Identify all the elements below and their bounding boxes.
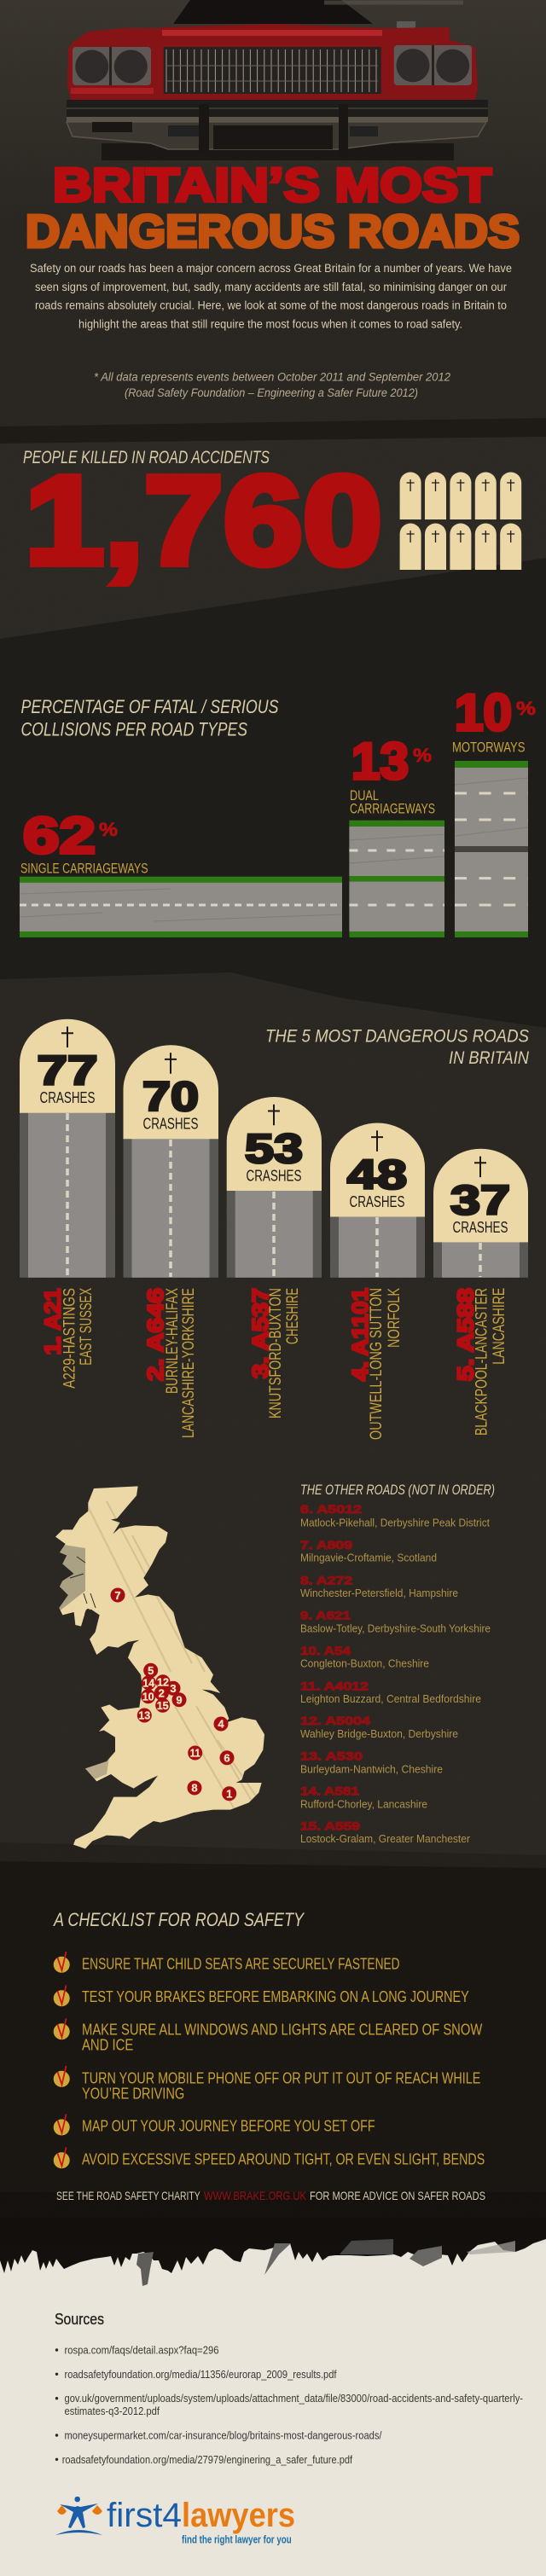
map pin numbers: 14 [142, 1676, 155, 1689]
map pin numbers: 3 [170, 1682, 177, 1695]
title line 2: DANGEROUS ROADS [26, 206, 520, 258]
column: A588 37 crashes [433, 1149, 528, 1278]
stat: motorways 10%: MOTORWAYS [452, 739, 526, 755]
column: A1101 48 crashes: CRASHES [350, 1193, 404, 1210]
list: sources: moneysupermarket.com/car-insurance/blog/britains-most-dangerous-roads/ [65, 2429, 382, 2441]
list: other roads: Matlock-Pikehall, Derbyshire Peak District [300, 1517, 490, 1529]
intro paragraph: seen signs of improvement, but, sadly, many accidents are still fatal, so minimising danger on our [35, 281, 507, 293]
heading: checklist: A CHECKLIST FOR ROAD SAFETY [52, 1909, 305, 1930]
vertical label: road 2 [142, 1288, 198, 1438]
intro paragraph [30, 262, 512, 331]
checklist items [82, 1954, 485, 2168]
vertical label: road 2: BURNLEY-HALIFAX [164, 1288, 182, 1394]
column: A646 70 crashes: 70 [142, 1075, 199, 1120]
map pin numbers: 7 [114, 1589, 121, 1602]
map pin numbers: 10 [142, 1690, 154, 1703]
heading: percentage of collisions: PERCENTAGE OF FATAL / SERIOUS [20, 696, 278, 717]
vertical label: road 2: 2. A646 [142, 1288, 168, 1381]
list: other roads: Leighton Buzzard, Central Bedfordshire [300, 1692, 481, 1705]
map pin numbers: 1 [226, 1787, 232, 1800]
vertical label: road 5: LANCASHIRE [491, 1288, 508, 1365]
checklist items: YOU’RE DRIVING [82, 2085, 184, 2103]
car bumper [67, 100, 488, 157]
checklist items: ENSURE THAT CHILD SEATS ARE SECURELY FASTENED [82, 1954, 400, 1972]
panel: map and other roads [51, 1480, 495, 1855]
road: motorway [455, 761, 528, 937]
map pin numbers: 6 [224, 1751, 230, 1764]
panel: people killed [23, 447, 521, 591]
vertical label: road 4 [347, 1288, 404, 1440]
list: other roads: Baslow-Totley, Derbyshire-South Yorkshire [300, 1622, 491, 1634]
list: other roads: 14. A581 [300, 1784, 359, 1797]
heading: people killed: PEOPLE KILLED IN ROAD ACCIDENTS [23, 447, 270, 467]
checklist items: AND ICE [82, 2036, 133, 2054]
vertical label: road 1: A229-HASTINGS [61, 1288, 78, 1389]
list: sources: rospa.com/faqs/detail.aspx?faq=296 [65, 2344, 218, 2356]
column: A1101 48 crashes [330, 1123, 425, 1278]
logo wordmark: first4 [107, 2497, 182, 2534]
column: A21 77 crashes: CRASHES [39, 1089, 96, 1106]
list: other roads: Winchester-Petersfield, Hampshire [300, 1587, 458, 1599]
vertical label: road 4: OUTWELL-LONG SUTTON [368, 1288, 386, 1440]
under car shadow [102, 143, 454, 160]
icons: check marks [54, 1952, 70, 2168]
left headlights [73, 47, 151, 85]
map pin numbers: 13 [138, 1709, 150, 1722]
column: A588 37 crashes: 37 [450, 1179, 510, 1224]
map pin numbers: 8 [191, 1782, 198, 1795]
stat: motorways 10%: 10 [455, 684, 512, 741]
map pin numbers: 4 [218, 1718, 224, 1731]
vertical label: road 5: BLACKPOOL-LANCASTER [473, 1288, 491, 1436]
right headlights [394, 45, 472, 85]
vertical label: road 2: LANCASHIRE-YORKSHIRE [180, 1288, 198, 1438]
charity note: SEE THE ROAD SAFETY CHARITY [56, 2189, 200, 2202]
intro paragraph: Safety on our roads has been a major concern across Great Britain for a number of years. We have [30, 262, 512, 275]
list: other roads: 12. A5004 [300, 1714, 370, 1727]
vertical label: road 1: EAST SUSSEX [78, 1288, 96, 1366]
list: sources: roadsafetyfoundation.org/media/11356/eurorap_2009_results.pdf [65, 2368, 337, 2381]
vertical label: road 4: NORFOLK [386, 1288, 404, 1348]
panel: collisions by road type [20, 684, 536, 937]
intro paragraph: highlight the areas that still require the most focus when it comes to road safety. [78, 317, 462, 331]
heading: sources: Sources [55, 2311, 104, 2328]
map pin numbers: 5 [148, 1664, 154, 1677]
map pin numbers: 11 [190, 1747, 200, 1760]
car body [67, 24, 478, 100]
charity note [56, 2189, 485, 2202]
list: other roads: Lostock-Gralam, Greater Manchester [300, 1832, 471, 1845]
vertical label: road 5 [452, 1288, 508, 1436]
icon: figure with scales [55, 2497, 102, 2535]
list: sources [55, 2344, 523, 2466]
panel: five most dangerous roads [20, 1019, 530, 1440]
map pin numbers: 2 [159, 1687, 165, 1700]
icon: ten gravestones [400, 473, 521, 570]
vertical label: road 1: 1. A21 [39, 1288, 65, 1355]
heading: five most dangerous roads: IN BRITAIN [449, 1047, 529, 1068]
heading: percentage of collisions [20, 696, 278, 740]
list: other roads: Burleydam-Nantwich, Cheshire [300, 1762, 443, 1776]
stat: dual carriageways 13%: CARRIAGEWAYS [350, 801, 435, 817]
panel: road safety checklist [52, 1909, 485, 2202]
stat: single carriageways 62%: SINGLE CARRIAGEWAYS [20, 861, 148, 877]
map pin numbers: 15 [157, 1699, 169, 1712]
map pin numbers: 12 [157, 1675, 169, 1688]
list: sources: estimates-q3-2012.pdf [65, 2405, 160, 2417]
column: A537 53 crashes: 53 [245, 1127, 303, 1172]
road: dual carriageway [349, 821, 444, 937]
column: A646 70 crashes: CRASHES [143, 1116, 198, 1133]
car windscreen [173, 0, 373, 24]
data footnote: * All data represents events between October 2011 and September 2012 [94, 370, 450, 384]
column: A21 77 crashes: 77 [38, 1049, 97, 1094]
logo: first4lawyers [55, 2497, 295, 2546]
column: A1101 48 crashes: 48 [347, 1152, 407, 1198]
intro paragraph: roads remains absolutely crucial. Here, we look at some of the most dangerous roads in Britain to [35, 299, 507, 312]
list: sources: roadsafetyfoundation.org/media/27979/enginering_a_safer_future.pdf [62, 2453, 352, 2466]
heading: percentage of collisions: COLLISIONS PER ROAD TYPES [20, 718, 247, 740]
road: single carriageway [20, 877, 342, 937]
vertical label: road 5: 5. A588 [452, 1288, 478, 1381]
vertical label: road 3: 3. A537 [247, 1288, 273, 1378]
car grille [164, 47, 381, 94]
stat: dual carriageways 13%: DUAL [350, 787, 379, 804]
charity note: FOR MORE ADVICE ON SAFER ROADS [310, 2189, 485, 2202]
column: A537 53 crashes: CRASHES [246, 1167, 302, 1184]
stat: dual carriageways 13%: 13 [351, 733, 409, 790]
heading: five most dangerous roads [265, 1025, 530, 1068]
stat: single carriageways 62% [20, 807, 148, 877]
vertical label: road 3 [247, 1288, 302, 1419]
list: other roads: 13. A530 [300, 1749, 363, 1763]
heading: other roads: THE OTHER ROADS (NOT IN ORDER) [300, 1482, 495, 1498]
stat: single carriageways 62%: 62 [23, 807, 96, 864]
stat: single carriageways 62%: % [99, 819, 118, 840]
illustration: red car front [67, 0, 488, 160]
list: other roads: Rufford-Chorley, Lancashire [300, 1798, 427, 1810]
column: A537 53 crashes [227, 1097, 322, 1278]
vertical label: road 3: CHESHIRE [284, 1288, 302, 1344]
checklist items: MAP OUT YOUR JOURNEY BEFORE YOU SET OFF [82, 2116, 375, 2134]
list: other roads: 15. A559 [300, 1819, 360, 1833]
map pin numbers: 9 [176, 1693, 183, 1706]
data footnote: (Road Safety Foundation – Engineering a Safer Future 2012) [125, 386, 418, 399]
list: other roads: 6. A5012 [300, 1502, 362, 1516]
panel: sources [55, 2311, 523, 2466]
column: A646 70 crashes [123, 1045, 218, 1278]
map pins [111, 1588, 236, 1801]
list: other roads: 7. A809 [300, 1538, 352, 1552]
data footnote [94, 370, 450, 399]
stat: motorways 10%: % [516, 698, 536, 719]
logo tagline: find the right lawyer for you [182, 2533, 292, 2546]
stat: dual carriageways 13%: % [413, 745, 432, 766]
map of Great Britain with numbered pins [55, 1486, 264, 1849]
list: other roads: Wahley Bridge-Buxton, Derbyshire [300, 1727, 458, 1740]
list: other roads: 11. A4012 [300, 1679, 369, 1692]
column: A588 37 crashes: CRASHES [452, 1219, 508, 1236]
list: other roads: 8. A272 [300, 1573, 352, 1587]
list: other roads: 10. A54 [300, 1644, 351, 1657]
stat: dual carriageways 13% [350, 733, 435, 817]
charity note: WWW.BRAKE.ORG.UK [204, 2189, 307, 2202]
vertical label: road 4: 4. A1101 [347, 1288, 373, 1381]
list: other roads: 9. A621 [300, 1608, 351, 1622]
title line 1: BRITAIN’S MOST [53, 158, 491, 212]
list: other roads: Milngavie-Croftamie, Scotland [300, 1551, 437, 1564]
main title [26, 158, 520, 258]
logo wordmark orange: lawyers [182, 2497, 295, 2534]
map pin numbers [114, 1589, 232, 1800]
stat: motorways 10% [452, 684, 536, 755]
big number 1,760: 1,760 [25, 450, 382, 591]
list: other roads: Congleton-Buxton, Cheshire [300, 1656, 429, 1670]
vertical label: road 1 [39, 1288, 96, 1389]
list: other roads [300, 1502, 491, 1845]
column: A21 77 crashes [20, 1019, 115, 1278]
vertical label: road 3: KNUTSFORD-BUXTON [267, 1288, 285, 1419]
